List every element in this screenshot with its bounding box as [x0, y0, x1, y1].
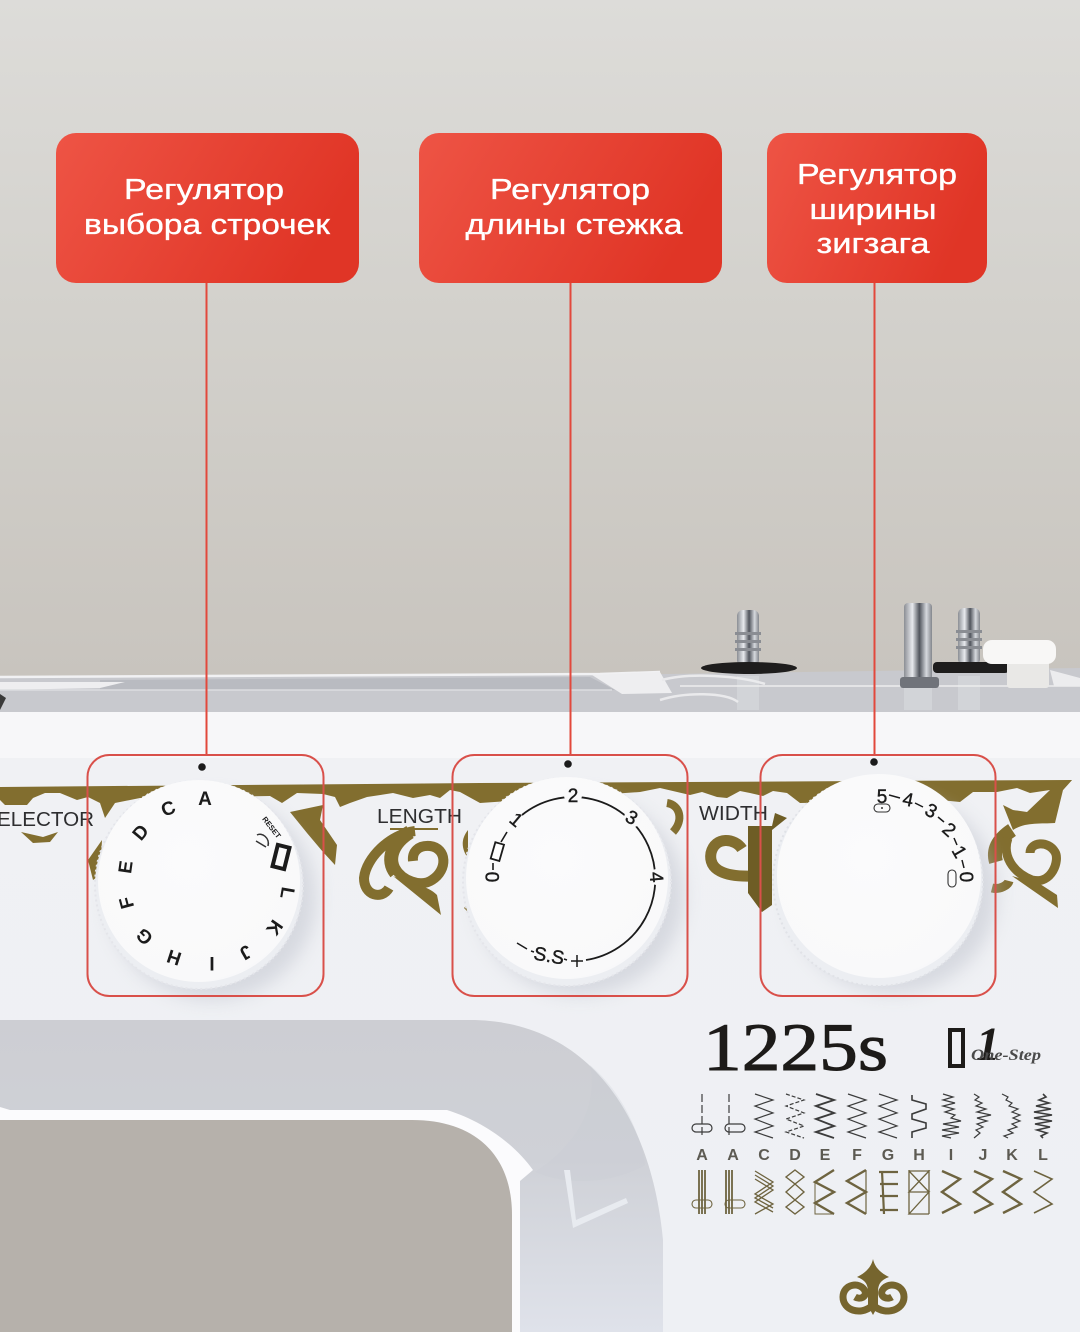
one-step logo: 1 [976, 1018, 1000, 1071]
white rim of opening [0, 1107, 533, 1332]
dial 1: stitch selector: L [275, 885, 298, 901]
callout: stitch length: Регулятор [490, 174, 650, 206]
thick chrome pin [900, 603, 939, 688]
arm shading arc [535, 1065, 645, 1181]
dial 1: stitch selector: F [116, 894, 139, 911]
front panel highlight [0, 712, 1080, 758]
stitch chart: letters: D [789, 1147, 801, 1164]
dial 2: stitch length: S.S [532, 943, 566, 969]
machine front body [0, 712, 1080, 1332]
panel labels [0, 803, 768, 831]
stitch chart: letters: H [913, 1147, 925, 1164]
callout: stitch selector: Регулятор [124, 174, 284, 206]
stitch chart: letters: G [882, 1147, 894, 1164]
dial 2: stitch length: 0 [483, 872, 504, 882]
arm recess [0, 1020, 663, 1332]
stitch chart: letters: I [949, 1147, 953, 1164]
gold scroll ornament: length [364, 829, 443, 915]
dial 1: stitch selector: H [165, 944, 184, 969]
white bobbin spool [983, 640, 1056, 688]
highlight frame: selector dial [88, 755, 324, 996]
gold scroll ornament: width [667, 803, 787, 912]
right felt disc and small pin [933, 608, 1009, 673]
stitch chart: lower row [692, 1170, 1052, 1214]
machine top surface [0, 668, 1080, 712]
arm reflection [564, 1170, 628, 1228]
callout: zigzag width [767, 133, 987, 283]
dial 1: stitch selector: G [132, 923, 158, 949]
spool pins and felt discs [701, 603, 1009, 688]
callout: stitch length [419, 133, 722, 283]
dial 1: stitch selector [95, 763, 316, 1000]
left spool pin [701, 610, 797, 674]
dial 1: stitch selector: E [115, 859, 138, 875]
dial 3: zigzag width [773, 758, 997, 993]
stitch chart: letters: C [758, 1147, 770, 1164]
callout 1 connector [206, 283, 208, 754]
length label: LENGTH [377, 806, 462, 828]
dial 3: zigzag width: 1 [947, 842, 970, 862]
callout: zigzag width: Регулятор [797, 159, 957, 191]
stitch chart: letters: E [820, 1147, 831, 1164]
stitch chart: upper row [692, 1094, 1052, 1138]
stitch chart: letters: K [1006, 1147, 1018, 1164]
callout: stitch selector: выбора строчек [84, 209, 330, 241]
stitch chart: letters: A [727, 1147, 739, 1164]
one-step logo: One-Step [971, 1047, 1041, 1064]
dial 3: zigzag width: 0 [955, 871, 976, 883]
callout: zigzag width: зигзага [816, 228, 931, 260]
dial 2: stitch length: 4 [645, 871, 666, 884]
dial 3: zigzag width: 5 [877, 787, 887, 808]
dial 1: stitch selector: RESET [260, 815, 283, 840]
dial 1: stitch selector: K [261, 915, 286, 939]
width label: WIDTH [699, 803, 768, 825]
dial 3: zigzag width: 2 [938, 819, 960, 842]
stitch chart: letters: A [696, 1147, 708, 1164]
dial 2: stitch length: 2 [568, 786, 578, 807]
callout: stitch selector [56, 133, 359, 283]
stitch chart: letters: L [1038, 1147, 1048, 1164]
dial 2: stitch length [463, 760, 684, 995]
highlight frame: width dial [760, 755, 996, 996]
opening under arm [0, 1120, 512, 1332]
dial 1: stitch selector: I [209, 952, 215, 973]
selector lower crescent [21, 832, 58, 843]
stitch chart: letters: J [979, 1147, 987, 1164]
dial 1: stitch selector: D [129, 821, 154, 845]
gold emblem [843, 1259, 904, 1315]
callout 2 connector [570, 283, 572, 754]
gold scroll ornament: right [992, 780, 1072, 908]
one-step logo [950, 1018, 1041, 1071]
highlight frame: length dial [452, 755, 688, 996]
gold ornamental band [0, 780, 1072, 914]
dial 1: stitch selector: C [158, 797, 179, 822]
callout: stitch length: длины стежка [466, 209, 684, 241]
dial 3: zigzag width: 4 [901, 789, 916, 812]
model number: 1225s [703, 1009, 888, 1085]
callout: zigzag width: ширины [810, 194, 936, 226]
background [0, 0, 1080, 680]
dial 2: stitch length: 1 [505, 809, 526, 832]
stitch chart: letters: F [852, 1147, 862, 1164]
callout 3 connector [874, 283, 876, 754]
stitch chart: letters [696, 1147, 1048, 1164]
dial 1: stitch selector: A [198, 789, 212, 810]
dial 2: stitch length: 3 [621, 807, 641, 830]
dial 3: zigzag width: 3 [921, 800, 940, 823]
dial 1: stitch selector: J [235, 940, 255, 963]
